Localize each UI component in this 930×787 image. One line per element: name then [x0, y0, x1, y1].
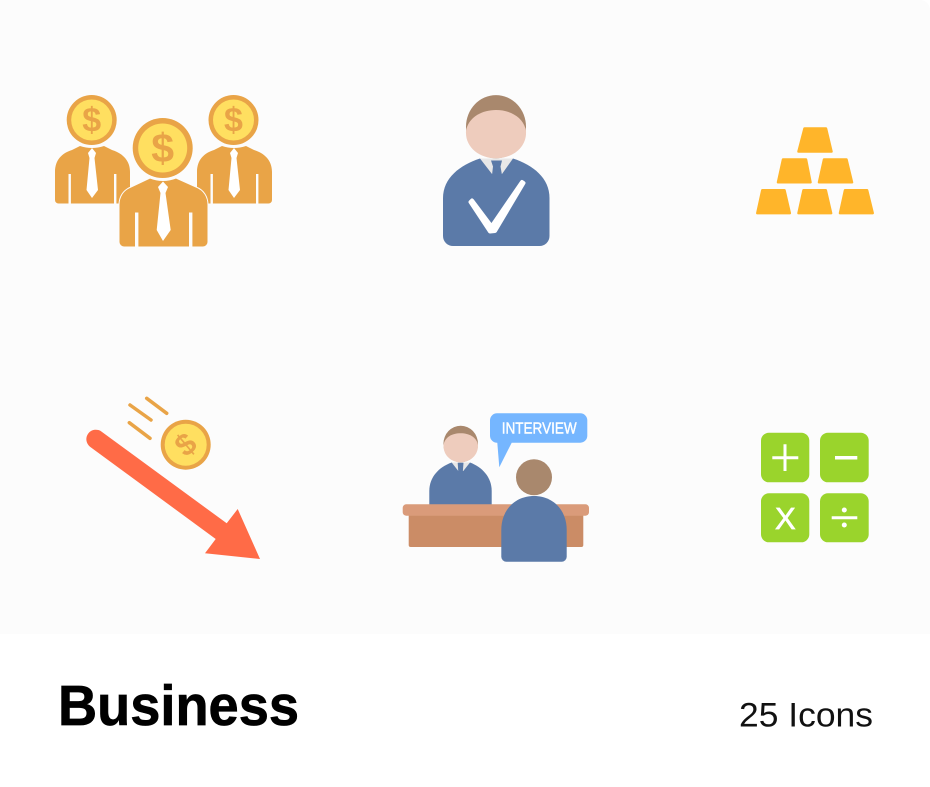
- check mark: [470, 182, 524, 232]
- title: Business: [58, 674, 299, 738]
- icon count: 25 Icons: [739, 697, 873, 735]
- collar: [480, 158, 513, 174]
- icon: money team: [55, 95, 272, 248]
- plus tile: [761, 433, 809, 482]
- divide tile: [820, 493, 869, 542]
- coin: [161, 420, 211, 470]
- icon: calculator operations: [761, 433, 869, 542]
- speed lines: [129, 398, 167, 438]
- icon: falling coin arrow: [86, 398, 260, 559]
- left businessman: [55, 95, 130, 204]
- center businessman: $: [151, 125, 174, 171]
- arrow: [86, 430, 260, 559]
- speech bubble: INTERVIEW: [502, 420, 577, 437]
- right businessman: $: [224, 102, 243, 140]
- coin: $: [168, 426, 203, 463]
- desk: [403, 504, 589, 547]
- minus tile: [820, 433, 869, 482]
- center businessman: [119, 118, 208, 248]
- multiply tile: X: [775, 501, 796, 536]
- icon: gold bars: [757, 128, 873, 213]
- face: [466, 110, 526, 158]
- tie: [491, 160, 502, 175]
- candidate: [501, 459, 567, 562]
- left businessman: $: [82, 102, 101, 140]
- icon: job interview: [403, 413, 589, 562]
- hair: [466, 95, 526, 158]
- speech bubble: [490, 413, 587, 467]
- right businessman: [197, 95, 272, 204]
- icon: approved employee: [443, 95, 550, 246]
- body: [443, 158, 550, 246]
- interviewer: [429, 426, 492, 504]
